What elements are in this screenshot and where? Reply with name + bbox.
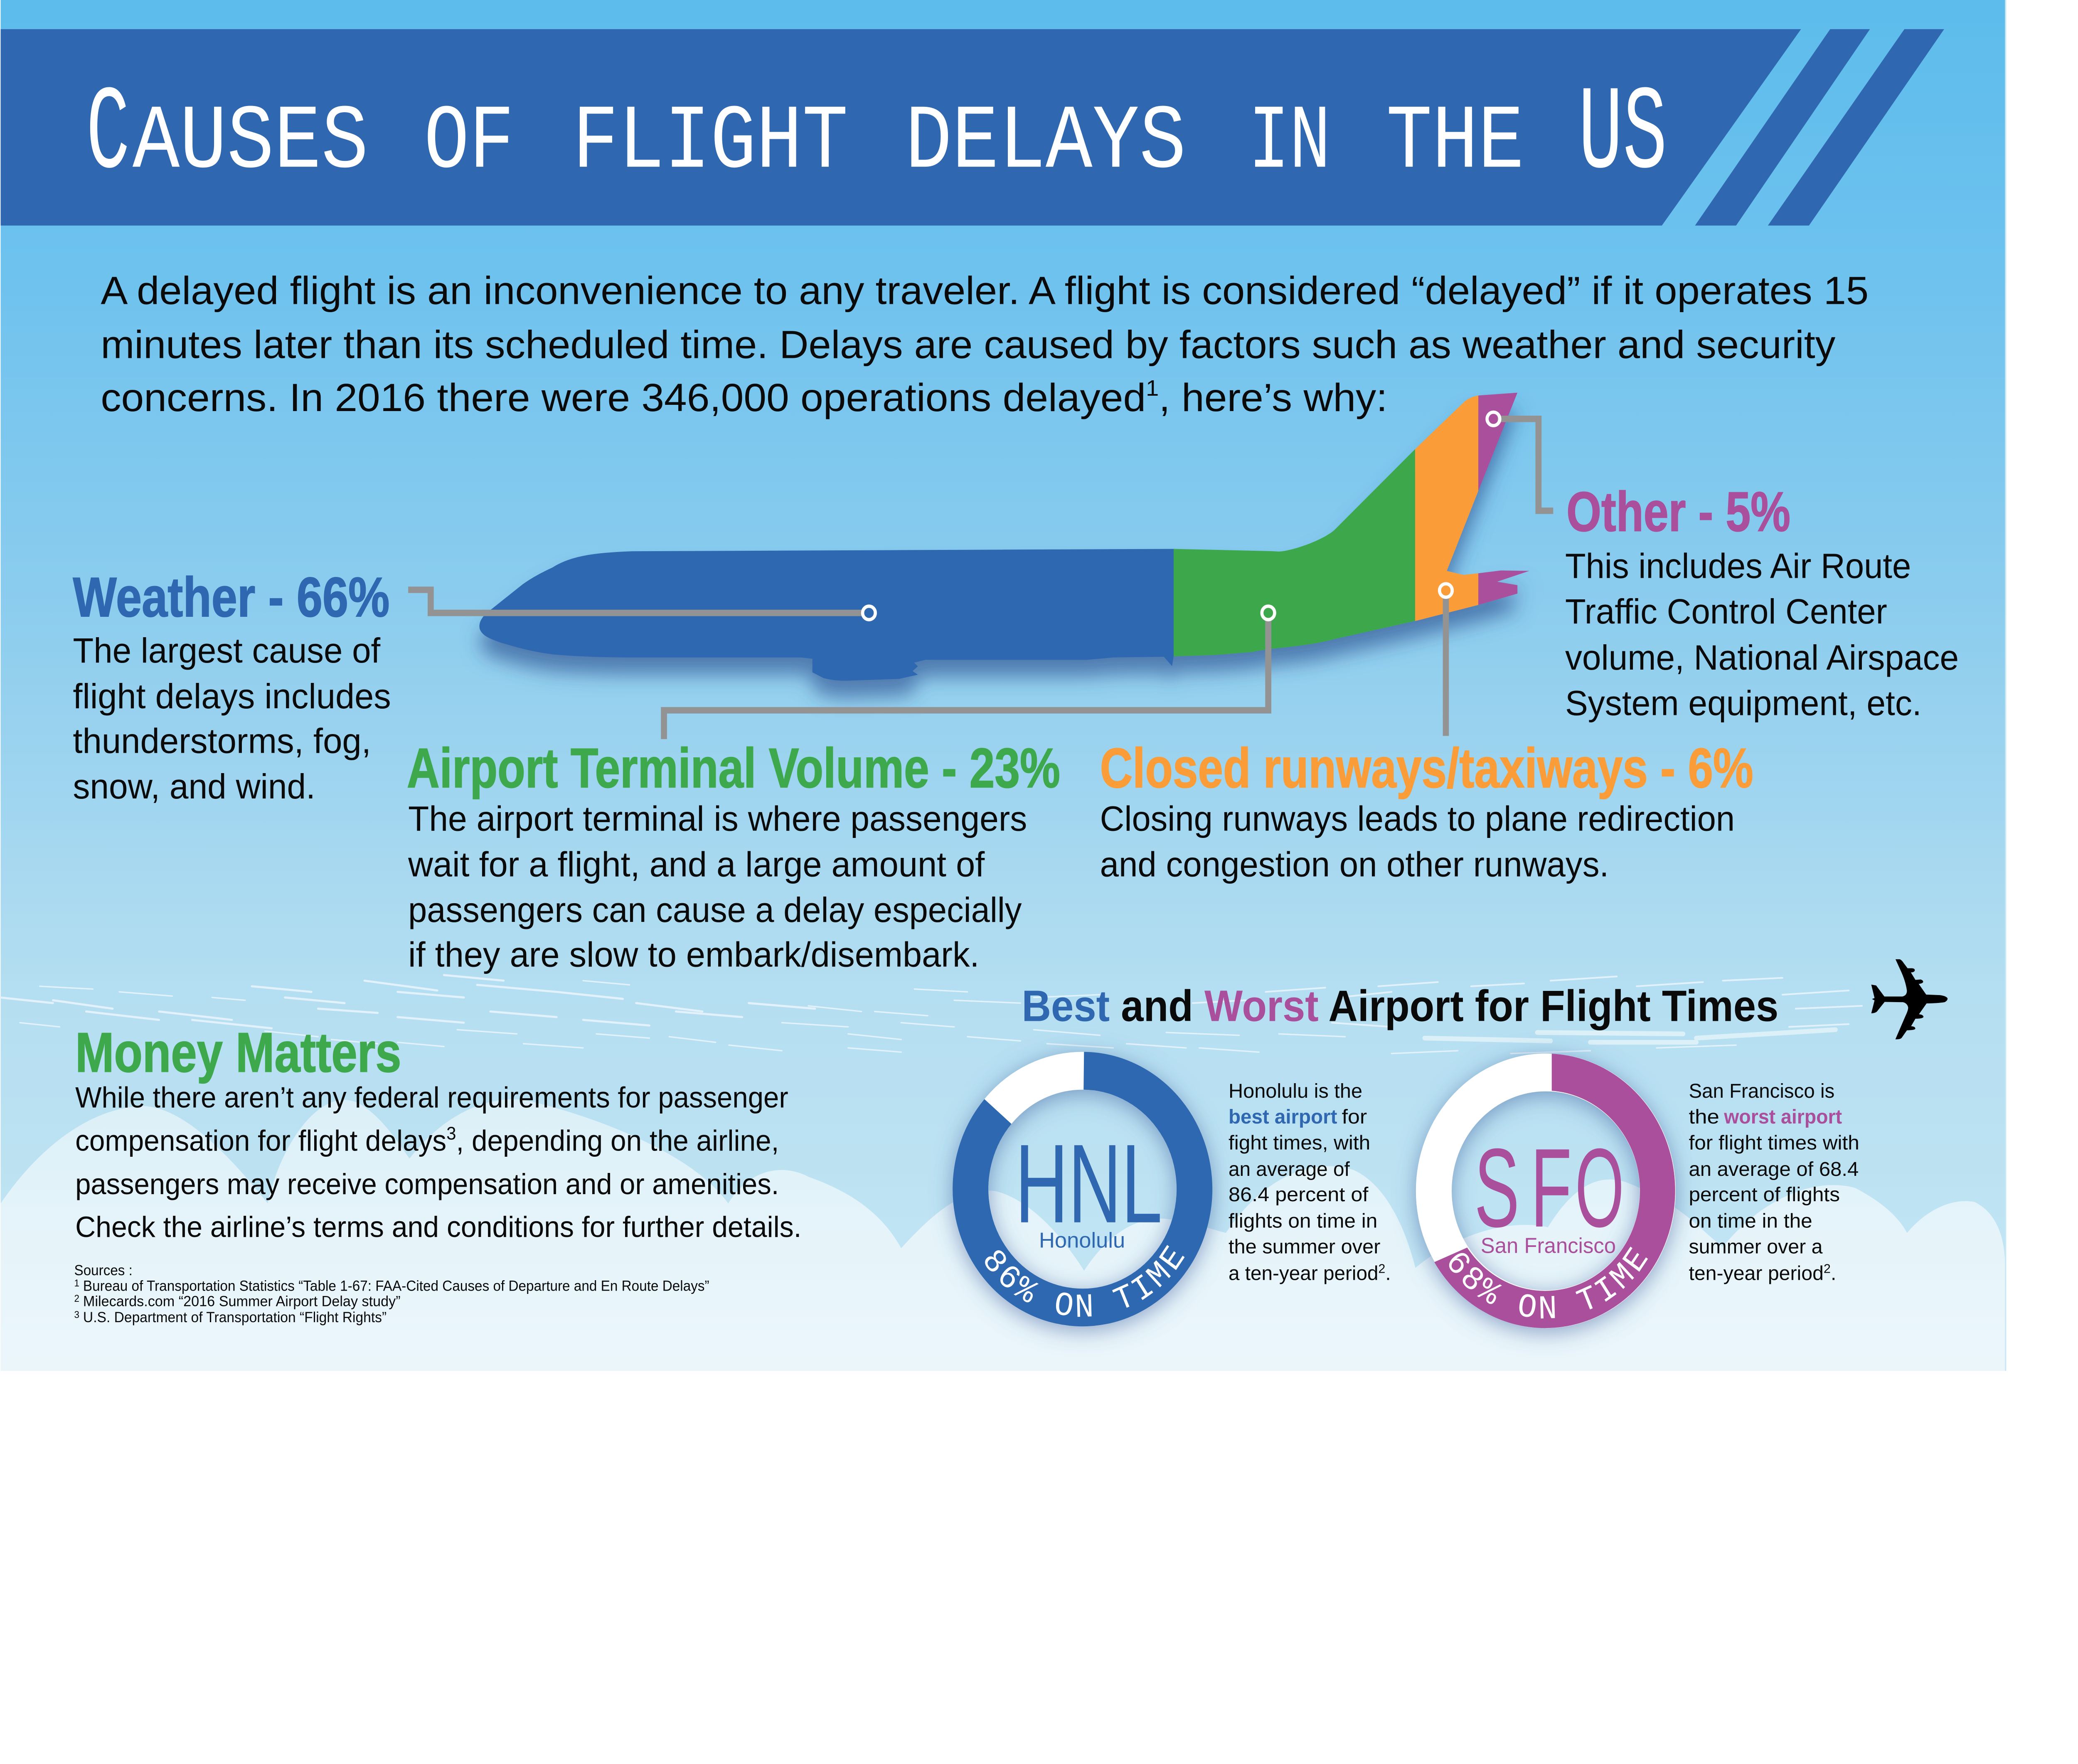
Honolulu label: Honolulu xyxy=(1039,1228,1125,1252)
text: San Francisco description: the xyxy=(1689,1106,1719,1128)
text: San Francisco description: an average of 68.4 xyxy=(1689,1158,1859,1180)
intro paragraph: 1 xyxy=(1146,376,1159,401)
callout: airport terminal volume: passengers can cause a delay especially xyxy=(408,891,1022,929)
callout: weather: thunderstorms, fog, xyxy=(73,722,371,761)
money matters body: 3 xyxy=(446,1123,456,1144)
intro paragraph: minutes later than its scheduled time. Delays are caused by factors such as weather and security xyxy=(101,323,1836,367)
86% on time label: 86% ON TIME xyxy=(974,1237,1195,1327)
text: Honolulu description: fight times, with xyxy=(1229,1131,1370,1154)
intro paragraph: concerns. In 2016 there were 346,000 operations delayed xyxy=(101,376,1050,420)
main title: FLIGHT xyxy=(573,91,848,195)
sources: U.S. Department of Transportation “Flight Rights” xyxy=(83,1309,387,1325)
callout: airport terminal volume xyxy=(407,737,1060,974)
text: Honolulu description: Honolulu is the xyxy=(1229,1080,1362,1102)
text: San Francisco description: San Francisco is xyxy=(1689,1080,1834,1102)
clouds xyxy=(1,1099,2005,1371)
closed runways segment 6% xyxy=(1415,395,1478,621)
callout: airport terminal volume: The airport terminal is where passengers xyxy=(408,800,1027,838)
text: Honolulu description: 2 xyxy=(1379,1262,1385,1276)
text: Honolulu description: 86.4 percent of xyxy=(1229,1183,1369,1205)
text: Honolulu description: a ten-year period xyxy=(1229,1262,1371,1284)
intro paragraph: A delayed flight is an inconvenience to any traveler. A flight is considered “delayed” if it operates 15 xyxy=(101,269,1869,313)
title banner xyxy=(1,29,1944,226)
money matters heading: Money Matters xyxy=(75,1021,401,1084)
banner stripe two xyxy=(1768,29,1944,226)
main title: C xyxy=(86,68,130,202)
weather segment 66% xyxy=(480,549,1174,681)
airplane side view chart xyxy=(408,393,1553,739)
sources: Milecards.com “2016 Summer Airport Delay study” xyxy=(83,1293,401,1310)
right edge strip xyxy=(2005,0,2006,1371)
callout: weather: Weather - 66% xyxy=(73,566,390,628)
money matters body: , depending on the airline, xyxy=(456,1124,779,1157)
text: San Francisco description: on time in the xyxy=(1689,1210,1812,1232)
text: Honolulu description: the summer over xyxy=(1229,1235,1380,1258)
banner band xyxy=(1,29,1801,226)
sources: 1 xyxy=(74,1278,79,1289)
wispy cloud streaks xyxy=(0,975,1862,1054)
best and worst heading: Best and Worst Airport for Flight Times xyxy=(1022,981,1778,1030)
background sky xyxy=(1,0,2006,1371)
sources xyxy=(74,1262,709,1325)
intro paragraph xyxy=(101,269,1869,420)
text: San Francisco description: summer over a xyxy=(1689,1235,1823,1258)
plane segments xyxy=(480,393,1529,681)
leader line: closed runways xyxy=(1445,595,1447,736)
callout: other: System equipment, etc. xyxy=(1565,684,1922,723)
sources: Sources : xyxy=(74,1262,133,1279)
callout: weather: The largest cause of xyxy=(73,631,380,670)
text: San Francisco description: . xyxy=(1831,1262,1836,1284)
SFO code: O xyxy=(1575,1125,1624,1250)
callout: weather: flight delays includes xyxy=(73,677,391,716)
text: San Francisco description: for flight times with xyxy=(1689,1131,1859,1154)
donut chart: SFO xyxy=(1434,1054,1675,1329)
callout: other xyxy=(1565,480,1959,723)
HNL code: HNL xyxy=(1015,1121,1162,1246)
money matters body: compensation for flight delays xyxy=(75,1124,443,1157)
sources: 2 xyxy=(74,1293,79,1304)
text: San Francisco description: ten-year period xyxy=(1689,1262,1815,1284)
airport terminal segment 23% xyxy=(1174,449,1415,656)
callout: closed runways xyxy=(1100,737,1753,884)
callout: weather xyxy=(73,566,391,806)
donut chart: HNL xyxy=(970,1071,1195,1327)
callout: airport terminal volume: Airport Terminal Volume - 23% xyxy=(407,737,1060,799)
main title: IN xyxy=(1248,91,1331,195)
main title: DELAYS xyxy=(905,91,1186,195)
callout: closed runways: Closing runways leads to plane redirection xyxy=(1100,800,1735,838)
callout: airport terminal volume: wait for a flight, and a large amount of xyxy=(408,845,985,884)
San Francisco label: San Francisco xyxy=(1481,1233,1616,1258)
leader line: other xyxy=(1497,419,1553,511)
main title xyxy=(86,68,1667,202)
SFO code xyxy=(1475,1125,1624,1250)
main title: US xyxy=(1578,68,1667,202)
sources: Bureau of Transportation Statistics “Table 1-67: FAA-Cited Causes of Departure and En Route Delays” xyxy=(83,1278,709,1294)
banner stripe one xyxy=(1695,29,1870,226)
main title: AUSES xyxy=(133,91,368,195)
text: Honolulu description: . xyxy=(1385,1262,1391,1284)
callout: other: volume, National Airspace xyxy=(1565,638,1959,678)
68% on time label: 68% ON TIME xyxy=(1437,1239,1659,1329)
money matters body: Check the airline’s terms and conditions for further details. xyxy=(75,1210,802,1244)
callout: closed runways: and congestion on other runways. xyxy=(1100,845,1609,884)
ring track and value xyxy=(1434,1054,1675,1328)
text: Honolulu description: flights on time in xyxy=(1229,1210,1377,1232)
money matters body xyxy=(75,1081,802,1244)
callout: other: This includes Air Route xyxy=(1565,547,1911,586)
intro paragraph: , here’s why: xyxy=(1159,376,1388,420)
main title: OF xyxy=(424,91,514,195)
main title: THE xyxy=(1386,91,1524,195)
callout: other: Other - 5% xyxy=(1566,480,1790,543)
other segment 5% fin xyxy=(1478,393,1517,491)
text: Honolulu description: best airport xyxy=(1229,1106,1337,1128)
other segment 5% stabilizer xyxy=(1478,570,1529,605)
callout: closed runways: Closed runways/taxiways - 6% xyxy=(1100,737,1753,799)
money matters body: While there aren’t any federal requirements for passenger xyxy=(75,1081,788,1114)
sources: 3 xyxy=(74,1309,79,1320)
leader line: airport terminal xyxy=(664,618,1268,739)
leader line: weather xyxy=(408,590,864,613)
text: San Francisco description: worst airport xyxy=(1723,1106,1842,1128)
text: San Francisco description xyxy=(1689,1080,1859,1284)
money matters panel xyxy=(75,1021,802,1244)
callout: airport terminal volume: if they are slow to embark/disembark. xyxy=(408,936,980,974)
text: San Francisco description: percent of flights xyxy=(1689,1183,1840,1205)
marker dots xyxy=(863,412,1500,620)
SFO code: F xyxy=(1531,1125,1572,1250)
text: Honolulu description xyxy=(1229,1080,1391,1284)
callout: other: Traffic Control Center xyxy=(1565,592,1887,631)
text: San Francisco description: 2 xyxy=(1824,1262,1831,1276)
callout: weather: snow, and wind. xyxy=(73,767,315,806)
text: Honolulu description: for xyxy=(1342,1106,1367,1128)
ring track and value xyxy=(970,1071,1194,1308)
money matters body: passengers may receive compensation and or amenities. xyxy=(75,1168,779,1200)
SFO code: S xyxy=(1475,1125,1519,1250)
icon: airplane top view xyxy=(1871,959,1948,1040)
text: Honolulu description: an average of xyxy=(1229,1158,1350,1180)
